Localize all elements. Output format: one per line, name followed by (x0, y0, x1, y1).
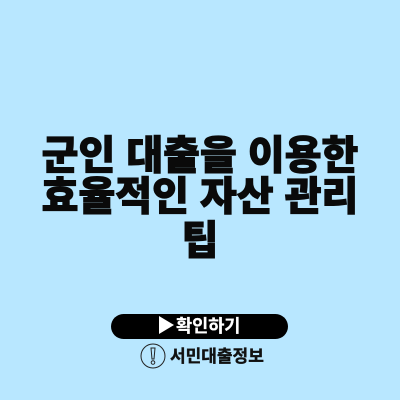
title: 팁 (182, 219, 218, 263)
icon: exclamation circle (140, 344, 166, 368)
title: 효율적인 자산 관리 (42, 175, 358, 219)
title: 군인 대출을 이용한 (42, 134, 358, 178)
brand: 서민대출정보 (140, 344, 264, 368)
button: 확인하기 (111, 314, 288, 339)
icon: play triangle (159, 316, 174, 334)
brand name: 서민대출정보 (170, 347, 264, 366)
title (42, 134, 358, 263)
button label: 확인하기 (176, 316, 240, 336)
